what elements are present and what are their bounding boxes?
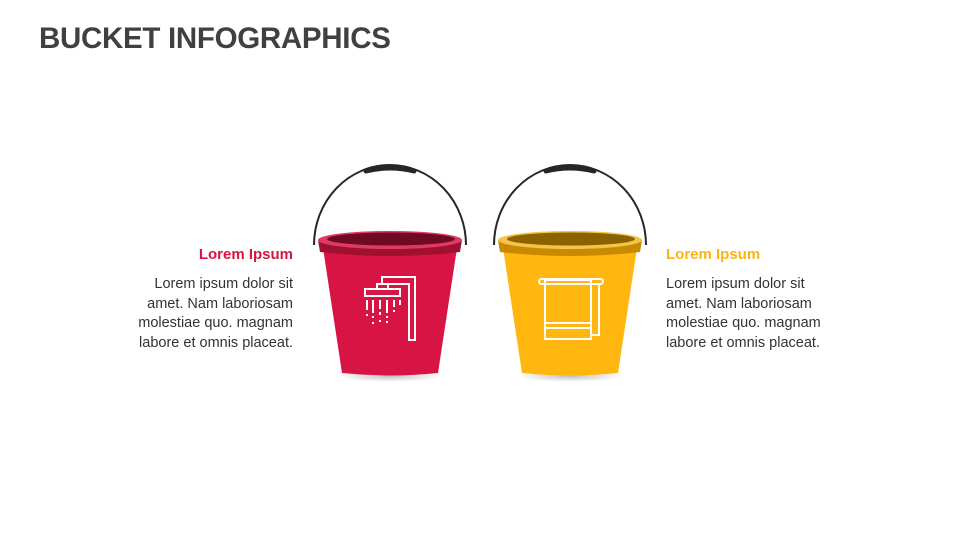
text block: right: labore et omnis placeat. [666,335,820,351]
text block: right [666,246,821,351]
text block: left: Lorem ipsum dolor sit [154,276,293,292]
text block: right: molestiae quo. magnam [666,315,821,331]
text block: right: Lorem ipsum dolor sit [666,276,805,292]
text block: left: molestiae quo. magnam [138,315,293,331]
title: BUCKET INFOGRAPHICS [39,22,391,55]
text block: left: amet. Nam laboriosam [147,296,293,312]
bucket: red [314,165,466,382]
bucket: yellow [494,165,646,382]
icon: towel [539,279,603,339]
text block: left [138,246,293,351]
text block: left: labore et omnis placeat. [139,335,293,351]
icon: shower [365,277,415,340]
text block: right: amet. Nam laboriosam [666,296,812,312]
text block: left: Lorem Ipsum [199,246,293,263]
text block: right: Lorem Ipsum [666,246,760,263]
